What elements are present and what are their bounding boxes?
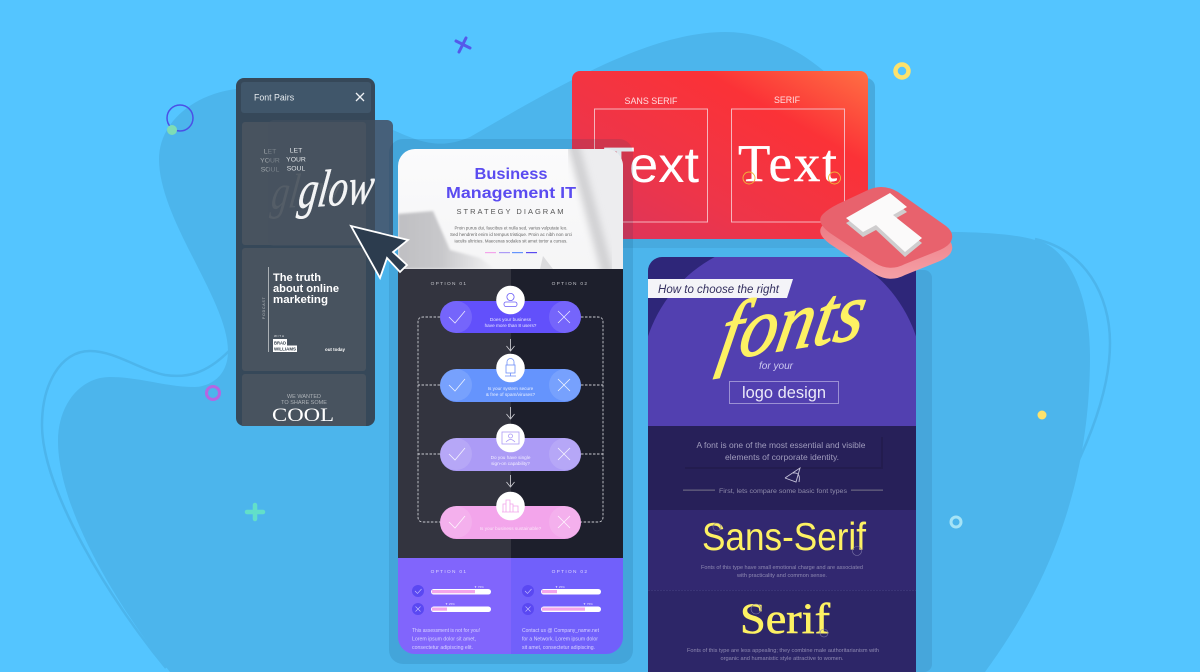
intro section: elements of corporate identity.: [725, 452, 839, 462]
script title: fonts: fonts: [712, 263, 875, 379]
results section: sit amet, consectetur adipiscing.: [522, 645, 595, 651]
step 4 pill: Is your business sustainable?: [480, 526, 542, 531]
card header: STRATEGY DIAGRAM: [456, 207, 564, 216]
title banner: [648, 279, 793, 298]
results section: consectetur adipiscing elit.: [412, 645, 473, 651]
serif section: organic and humanistic style attractive to women.: [720, 656, 844, 662]
step 2 pill: & free of spam/viruses?: [486, 392, 536, 397]
step 1 pill: Does your business: [490, 317, 532, 322]
template card: podcast: WITH: [274, 334, 285, 338]
shadow of right infographic: [660, 270, 932, 672]
sans-serif section: Fonts of this type have small emotional charge and are associated: [701, 565, 863, 571]
panel: business management infographic: [398, 140, 623, 654]
card header: iaculis ultricies. Maecenas sodales sit amet tortor a cursus.: [454, 238, 568, 244]
card header: [398, 149, 623, 269]
template card: glow: LET: [264, 148, 276, 156]
title banner: How to choose the right: [658, 284, 780, 296]
serif section: Serif: [740, 596, 831, 643]
template card: podcast: WILLIAMS: [274, 347, 296, 352]
results section: [398, 558, 623, 654]
option 2 bars: [522, 585, 601, 615]
decoration: violet ring: [206, 386, 220, 400]
card header: Business: [474, 166, 548, 183]
for your caption: for your: [759, 361, 794, 372]
template card: podcast: out today: [325, 347, 345, 352]
results section: OPTION 01: [431, 569, 467, 575]
option 1 bars: ▼ 25%: [445, 602, 455, 606]
step 3 pill: sign-on capability?: [491, 461, 530, 466]
panel: translucent floating glow template: SOUL: [287, 166, 305, 172]
decoration: purple cross: [456, 38, 470, 52]
flowchart section: [398, 269, 623, 558]
template card: cool: COOL: [272, 405, 334, 426]
serif section: Fonts of this type are less appealing; they combine male authoritarianism with: [687, 648, 879, 654]
panel: translucent floating glow template: LET: [290, 148, 302, 154]
letter T: [846, 193, 922, 257]
option 1 bars: [412, 585, 491, 615]
option 2 bars: ▼ 25%: [555, 585, 565, 589]
template card: podcast: The truth: [273, 272, 321, 284]
serif section: [648, 590, 916, 672]
sans text sample: Text: [603, 137, 699, 193]
template card: podcast: [242, 248, 366, 371]
step 4 pill: [440, 492, 581, 539]
results section: OPTION 02: [552, 569, 588, 575]
results section: for a Network. Lorem ipsum dolor: [522, 636, 598, 642]
template card: cool: WE WANTED: [287, 394, 321, 400]
decoration: yellow ring: [896, 64, 908, 78]
step 3 pill: Do you have single: [491, 455, 531, 460]
panel: translucent floating glow template: [268, 120, 393, 246]
sidebar header: [241, 82, 371, 113]
panel: translucent floating glow template: YOUR: [286, 156, 306, 164]
sans-serif section: [648, 510, 916, 590]
decoration: green plus: [247, 505, 263, 519]
template card: podcast: BRAD: [274, 340, 287, 345]
results section: Lorem ipsum dolor sit amet,: [412, 636, 476, 642]
panel: serif vs sans serif comparison: SANS SERIF: [624, 96, 678, 106]
template card: cool: [242, 374, 366, 426]
template card: podcast: marketing: [273, 294, 328, 306]
blob outline right: [1035, 239, 1110, 484]
panel: how to choose fonts infographic: [641, 240, 923, 672]
shadow of red panel: [580, 78, 875, 248]
intro section: A font is one of the most essential and visible: [696, 440, 866, 450]
template card: podcast: PODCAST: [262, 296, 266, 319]
intro section: [648, 426, 916, 510]
card header: Sed hendrerit enim id tempus tristique. Proin ac nibh non orci: [450, 232, 572, 238]
intro section: First, lets compare some basic font types: [719, 488, 848, 495]
step 2 pill: [440, 354, 581, 402]
decoration: yellow dot: [1038, 410, 1046, 420]
flowchart section: OPTION 02: [552, 281, 588, 287]
template card: glow: glow: [268, 162, 344, 220]
card header: Proin purus dui, faucibus et nulla sed, varius vulputate leo.: [454, 226, 568, 232]
logo design box: logo design: [742, 384, 826, 402]
template card: cool: TO SHARE SOME: [281, 400, 327, 406]
panel: font pairs sidebar: [236, 78, 375, 434]
blob outline left: [42, 351, 229, 668]
template card: podcast: about online: [273, 283, 339, 295]
template card: glow: SOUL: [261, 166, 279, 174]
sans-serif section: Sans-Serif: [702, 516, 866, 559]
step 2 pill: Is your system secure: [488, 386, 534, 391]
decoration: blue outline circle with green dot: [167, 105, 193, 135]
decoration: pale ring: [951, 517, 961, 527]
step 1 pill: have more than 8 users?: [485, 323, 537, 328]
results section: This assessment is not for you!: [412, 628, 480, 634]
template card: glow: YOUR: [260, 158, 280, 164]
step 1 pill: [440, 286, 581, 333]
template card: glow: [242, 122, 366, 245]
sidebar header: Font Pairs: [254, 92, 295, 102]
panel: translucent floating glow template: glow: [295, 157, 378, 220]
arrow cursor: [351, 226, 408, 278]
results section: Contact us @ Company_name.net: [522, 628, 600, 634]
option 2 bars: ▼ 75%: [583, 602, 593, 606]
serif text sample: Text: [738, 135, 837, 193]
logo design box: [730, 382, 838, 404]
panel: serif vs sans serif comparison: [572, 71, 868, 239]
step 3 pill: [440, 424, 581, 471]
flowchart section: OPTION 01: [431, 281, 467, 287]
option 1 bars: ▼ 75%: [474, 585, 484, 589]
icon: 3D letter T tile: [820, 187, 952, 279]
shadow of central infographic: [389, 139, 633, 664]
sans-serif section: with practicality and common sense.: [737, 573, 827, 579]
card header: Management IT: [446, 185, 576, 202]
panel: serif vs sans serif comparison: SERIF: [774, 95, 800, 105]
